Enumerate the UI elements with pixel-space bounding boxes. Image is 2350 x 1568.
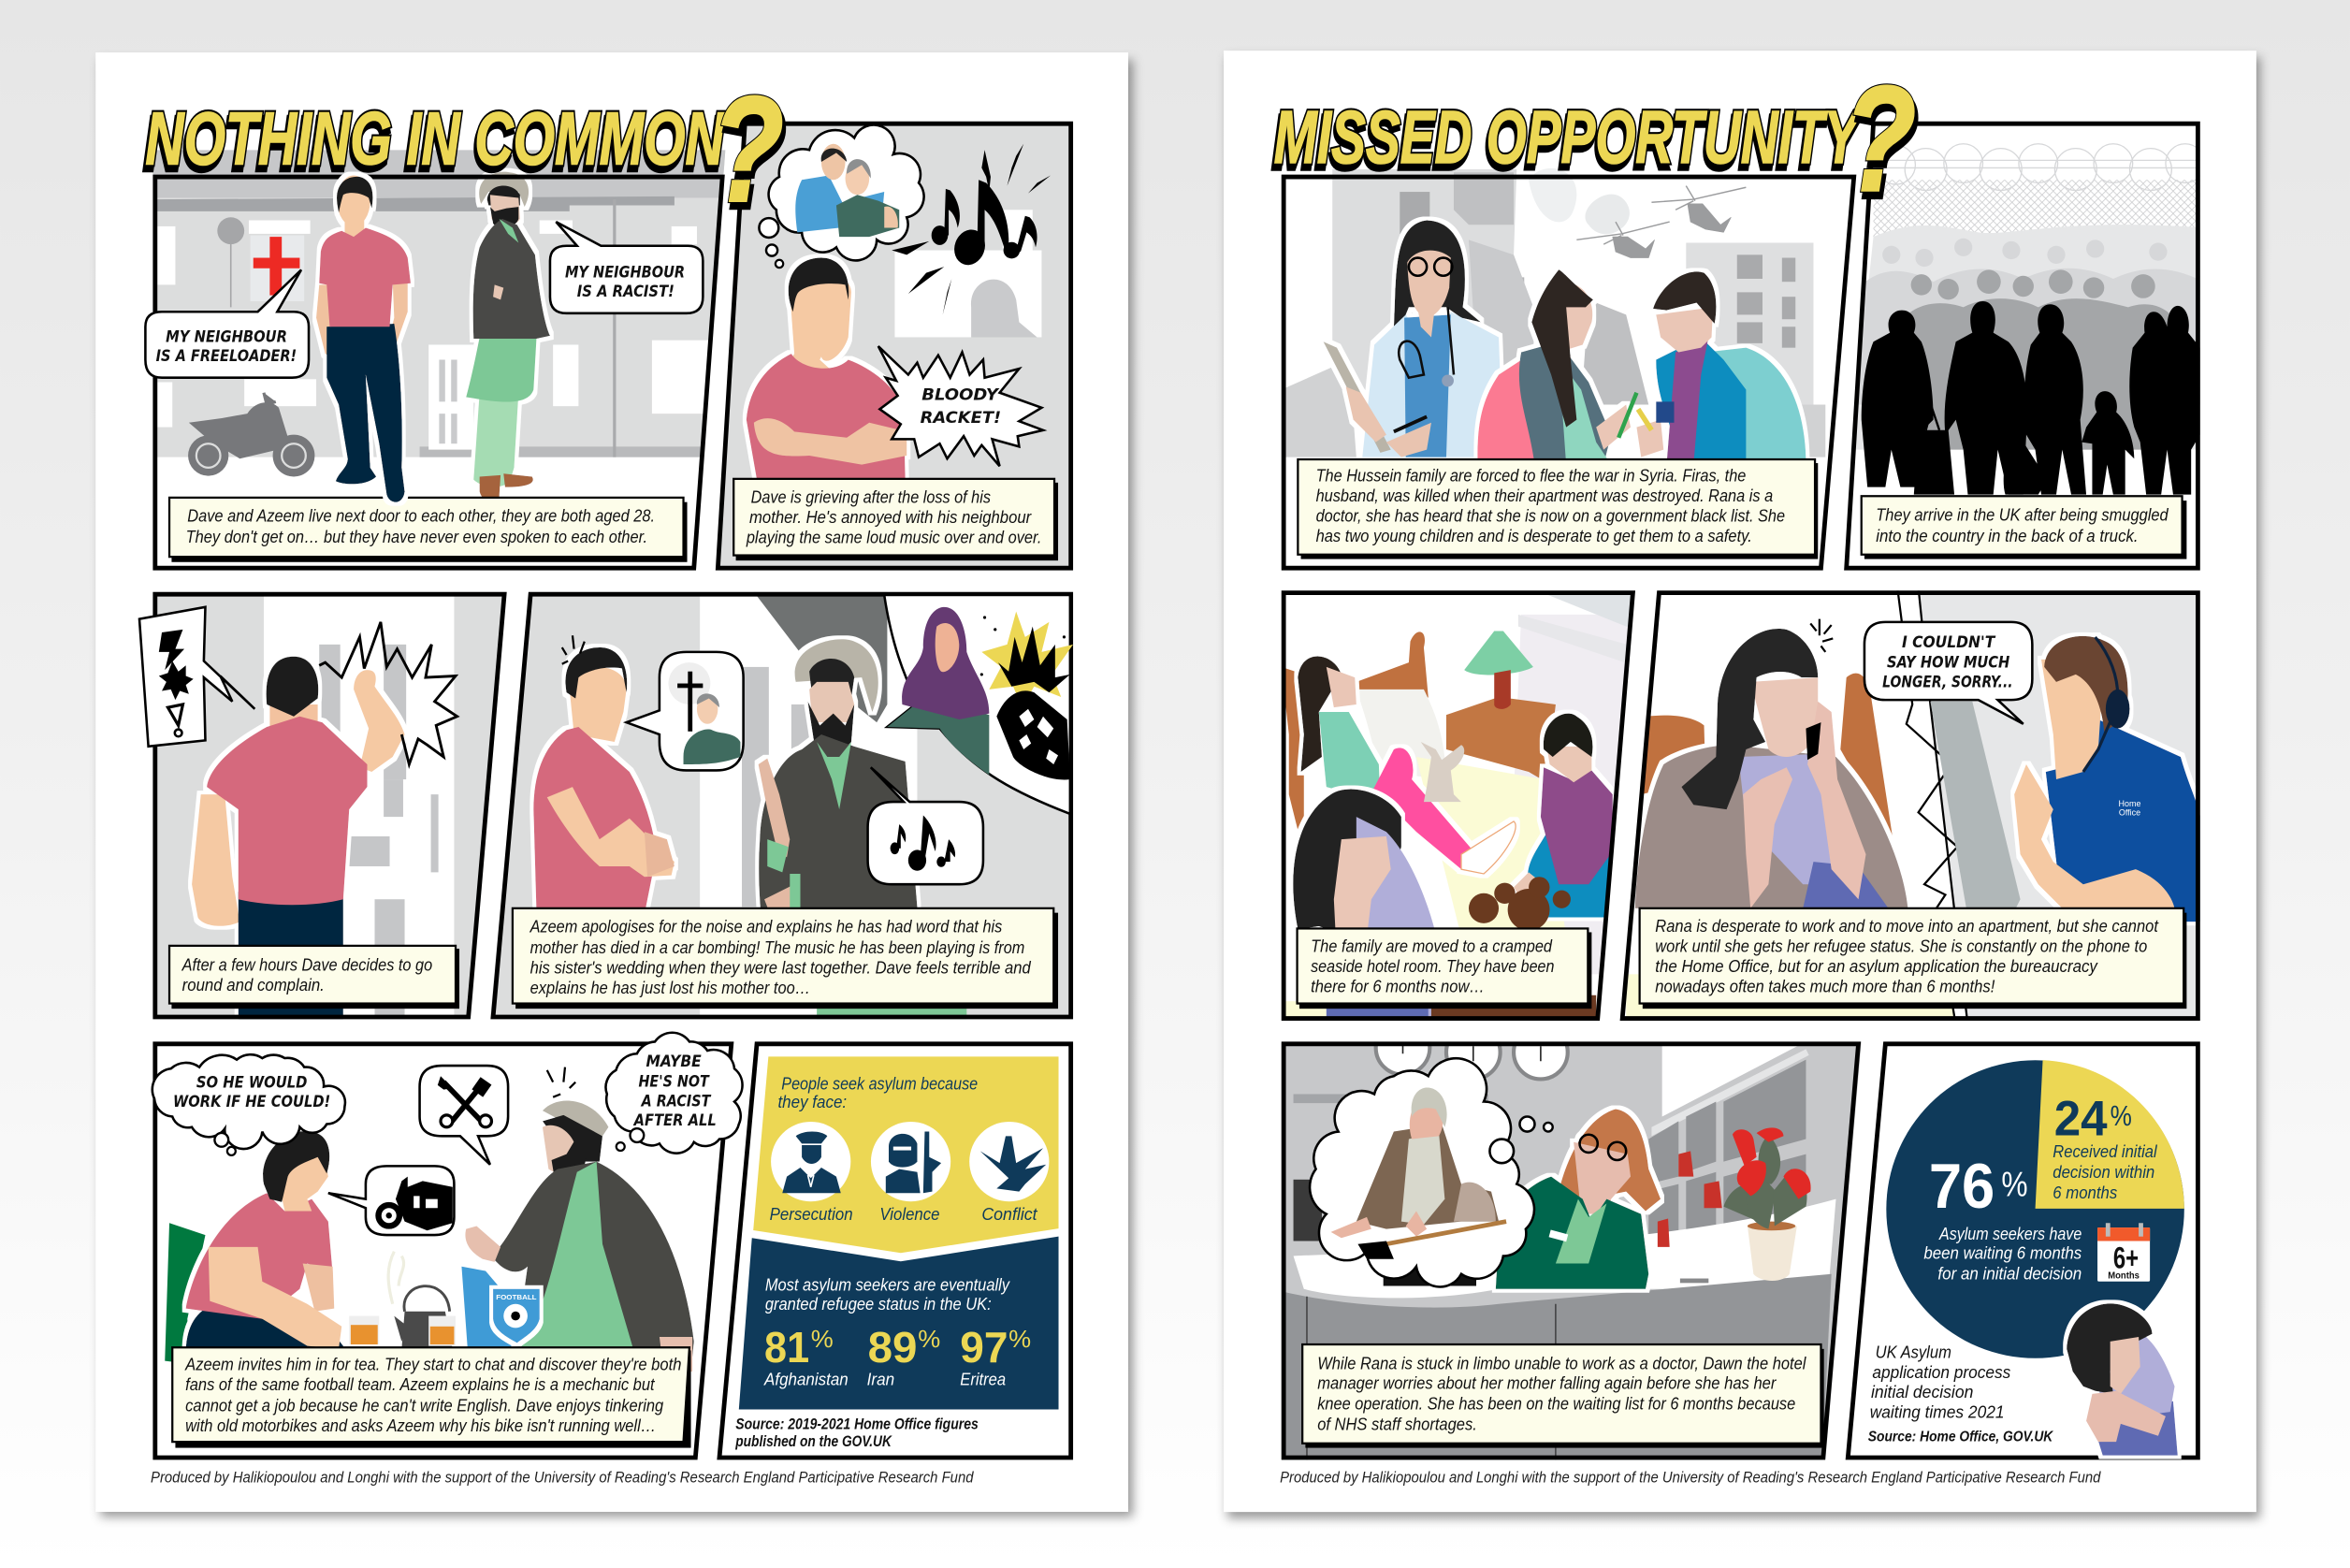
stat: 76 percent: Asylum seekers have: [1938, 1224, 2082, 1243]
text: UK asylum waiting times: waiting times 2021: [1870, 1402, 2005, 1422]
key tags: [1658, 1151, 1722, 1247]
figure: girl: [1477, 269, 1631, 465]
icon: calendar 6+ months: [2097, 1223, 2150, 1282]
title: Missed opportunity: MISSED OPPORTUNITY: [1274, 94, 1863, 179]
speech bubble: music: [868, 767, 983, 884]
stat: 76 percent: [1923, 1152, 2082, 1283]
source note: [734, 1416, 979, 1450]
stat: Iran 89%: Iran: [867, 1369, 894, 1388]
panel: phone call: [1616, 588, 2203, 1025]
heading: people seek asylum: [777, 1074, 978, 1111]
green cushion: [165, 1223, 205, 1364]
text: UK asylum waiting times: initial decision: [1871, 1382, 1973, 1401]
figure: doctor: [1324, 220, 1503, 457]
thought bubble: maybe not a racist: MAYBE: [646, 1052, 702, 1070]
label: conflict: Conflict: [981, 1204, 1037, 1224]
lamp: [1464, 631, 1533, 709]
speech bubble: racist: MY NEIGHBOUR: [565, 262, 685, 281]
page: left: [95, 52, 1128, 1512]
caption: cramped hotel: seaside hotel room. They have been: [1311, 956, 1554, 976]
stat: Eritrea 97%: 97: [960, 1323, 1008, 1372]
border: panel 7: [1284, 177, 1854, 568]
figure: Rana head in hand: [2067, 1303, 2178, 1456]
title: Nothing in common: [144, 65, 786, 239]
caption: Hussein family: The Hussein family are forced to flee the war in Syria. Firas, the: [1316, 466, 1746, 486]
wall clocks: [1376, 1021, 1568, 1079]
stat: 76 percent: 76: [1929, 1152, 1995, 1222]
plant: [1723, 1127, 1811, 1281]
stat: Eritrea 97%: Eritrea: [960, 1369, 1006, 1388]
silhouettes: refugees: [1862, 301, 2200, 495]
caption: tea chat: Azeem invites him in for tea. They start to chat and discover they're both: [184, 1354, 681, 1373]
caption: Dave and Azeem: Dave and Azeem live next door to each other, they are both aged 28.: [187, 506, 655, 526]
caption: Dave complains: round and complain.: [182, 975, 325, 995]
title: Missed opportunity: ?: [1847, 61, 1919, 228]
stat: 24 percent: [2053, 1092, 2157, 1202]
border: panel 4: [493, 594, 1071, 1017]
figure: girl on bed: [1298, 656, 1516, 874]
title: Nothing in common: ?: [712, 65, 784, 233]
stat: Afghanistan 81%: Afghanistan: [763, 1369, 849, 1388]
caption: Dawn: knee operation. She has been on the waiting list for 6 months because: [1317, 1394, 1795, 1414]
figure: Dave standing: [316, 175, 411, 502]
caption: Rana desperate: work until she gets her refugee status. She is constantly on the phone to: [1655, 936, 2147, 955]
border: panel 6: [719, 1044, 1071, 1458]
border: panel 8: [1847, 123, 2198, 568]
title: Missed opportunity: MISSED OPPORTUNITY: [1274, 94, 1863, 179]
title: Missed opportunity: ?: [1844, 54, 1916, 222]
caption: Rana desperate: Rana is desperate to work and to move into an apartment, but she cannot: [1655, 916, 2159, 936]
stat: 76 percent: %: [2001, 1165, 2028, 1203]
knock burst: [319, 622, 457, 764]
caption: smuggled: [1862, 496, 2186, 559]
panel: waiting-time statistics: [1847, 1041, 2200, 1459]
caption: Dave complains: After a few hours Dave decides to go: [181, 954, 432, 974]
banner: refugee status (navy): [739, 1237, 1059, 1410]
speech burst: bloody racket: [878, 346, 1043, 466]
stat: 24 percent: decision within: [2053, 1162, 2154, 1182]
caption: tea chat: with old motorbikes and asks Azeem why his bike isn't running well…: [185, 1416, 656, 1435]
caption: Dave and Azeem: [169, 498, 688, 562]
border: panel 1: [155, 177, 722, 568]
heading: most asylum seekers: [765, 1274, 1010, 1314]
caption: Rana desperate: [1640, 908, 2186, 1009]
figure: Rana on phone: [1635, 629, 1908, 908]
caption: Dawn: While Rana is stuck in limbo unable to work as a doctor, Dawn the hotel: [1317, 1353, 1806, 1372]
source note: Source: 2019-2021 Home Office figures: [735, 1416, 979, 1433]
title: Nothing in common: ?: [714, 71, 786, 239]
title: Nothing in common: NOTHING IN COMMON: [145, 95, 725, 180]
caption: Azeem apologises: explains he has just lost his mother too…: [530, 978, 810, 997]
figure: Dawn receptionist: [1496, 1110, 1661, 1289]
heading: people seek asylum: they face:: [777, 1092, 847, 1111]
caption: Rana desperate: nowadays often takes much more than 6 months!: [1655, 977, 1995, 996]
stat: 24 percent: %: [2111, 1100, 2132, 1132]
badge: football: FOOTBALL: [496, 1293, 537, 1301]
caption: Azeem apologises: his sister's wedding when they were last together. Dave feels terrible and: [530, 958, 1031, 978]
key rack: [1648, 1060, 1806, 1274]
caption: Dave complains: [169, 946, 459, 1009]
text: UK asylum waiting times: UK Asylum: [1876, 1342, 1951, 1361]
nightstand: [1446, 697, 1556, 782]
border: panel 10: [1622, 593, 2198, 1019]
caption: Azeem apologises: [513, 908, 1058, 1009]
memory bubble: mother and car bomb: [884, 595, 1073, 814]
figure: Azeem sitting: [465, 1100, 694, 1376]
panel: Dave knocks: [139, 589, 510, 1026]
icon: violence: [871, 1122, 950, 1201]
title: Missed opportunity: ?: [1844, 54, 1916, 222]
speech bubble: home office: SAY HOW MUCH: [1887, 653, 2009, 672]
speech bubble: freeloader: MY NEIGHBOUR: [166, 327, 287, 345]
caption: cramped hotel: The family are moved to a cramped: [1311, 936, 1553, 955]
panel: tea together: [150, 1033, 743, 1463]
stat: Afghanistan 81%: %: [811, 1327, 834, 1353]
speech bubble: home office: LONGER, SORRY...: [1882, 673, 2013, 691]
panel: smuggled into UK: [1840, 120, 2205, 573]
caption: Hussein family: [1298, 459, 1818, 559]
credit: right page: Produced by Halikiopoulou and Longhi with the support of the University of Reading's Research England Participative Research Fund: [1280, 1468, 2101, 1486]
lightning divider: [1897, 588, 1967, 1025]
title: Nothing in common: ?: [712, 65, 784, 233]
thought bubble: mother fell: [1310, 1058, 1553, 1286]
caption: Rana desperate: the Home Office, but for an asylum application the bureaucracy: [1655, 956, 2098, 976]
caption: Dave grieving: Dave is grieving after the loss of his: [751, 486, 991, 506]
thought bubble: maybe not a racist: AFTER ALL: [632, 1111, 717, 1129]
stat: 76 percent: for an initial decision: [1937, 1263, 2082, 1283]
figure: boy: [1636, 271, 1806, 465]
thought bubble: maybe not a racist: HE'S NOT: [638, 1071, 710, 1090]
stat: 24 percent: 6 months: [2053, 1183, 2117, 1202]
stat: Afghanistan 81%: [763, 1323, 849, 1388]
figure: boy sitting: [1514, 714, 1613, 917]
caption: Dave grieving: playing the same loud music over and over.: [746, 528, 1041, 547]
thought bubble: maybe not a racist: A RACIST: [640, 1091, 712, 1110]
figure: teddy bear: [1469, 877, 1571, 931]
stat: 24 percent: Received initial: [2053, 1141, 2157, 1161]
armchair: [1641, 716, 1705, 794]
border: panel 12: [1848, 1044, 2198, 1458]
speech burst: bloody racket: RACKET!: [921, 408, 1001, 427]
panel: hotel room: [1279, 588, 1641, 1034]
panel: asylum facts: [718, 1041, 1073, 1459]
figure: Azeem standing: [466, 172, 550, 502]
caption: Dave grieving: [733, 479, 1058, 560]
speech bubble: freeloader: [145, 269, 309, 378]
stat: Eritrea 97%: [960, 1323, 1031, 1388]
fence and crowd: [1851, 144, 2205, 450]
panel: hotel manager: [1279, 1021, 1866, 1463]
speech bubble: motorbike: [328, 1166, 454, 1235]
caption: tea chat: cannot get a job because he can't write English. Dave enjoys tinkering: [185, 1395, 664, 1415]
panel: neighbours outside houses: [145, 150, 734, 577]
speech bubble: racist: [550, 222, 703, 313]
figure: Home Office worker: Office: [2119, 808, 2140, 818]
banner: reasons (yellow): [753, 1056, 1059, 1253]
icon: calendar 6+ months: 6+: [2113, 1241, 2139, 1274]
icon: calendar 6+ months: Months: [2108, 1270, 2140, 1282]
heading: most asylum seekers: Most asylum seekers are eventually: [765, 1274, 1010, 1294]
label: violence: Violence: [879, 1204, 939, 1224]
action marks: [562, 635, 585, 664]
stat: Iran 89%: %: [918, 1327, 940, 1353]
stat: Afghanistan 81%: 81: [764, 1323, 809, 1372]
counter: [1294, 1199, 1835, 1298]
caption: Hussein family: has two young children and is desperate to get them to a safety.: [1316, 526, 1752, 545]
caption: Azeem apologises: mother has died in a car bombing! The music he has been playing is from: [530, 937, 1024, 957]
figure: bunny: [1421, 742, 1464, 802]
caption: Hussein family: husband, was killed when their apartment was destroyed. Rana is a: [1316, 486, 1773, 505]
swearing speech box: [139, 607, 254, 747]
panel: fleeing Syria: [1279, 150, 1863, 573]
caption: Dave and Azeem: They don't get on… but they have never even spoken to each other.: [186, 527, 647, 546]
credit: left page: Produced by Halikiopoulou and Longhi with the support of the University of Reading's Research England Participative Research Fund: [151, 1468, 974, 1486]
stat: Eritrea 97%: %: [1008, 1327, 1031, 1353]
stat: Iran 89%: [867, 1323, 940, 1388]
title: Missed opportunity: [1272, 54, 1919, 228]
panel: Azeem apologises: [487, 589, 1079, 1026]
border: panel 11: [1284, 1044, 1859, 1458]
speech bubble: tools: [420, 1066, 508, 1165]
icon: music notes: [892, 144, 1051, 314]
panel: Dave grieving: [704, 120, 1079, 573]
caption: Dawn: [1302, 1344, 1824, 1448]
border: panel 2: [718, 123, 1071, 568]
helicopters: [1576, 186, 1746, 258]
caption: Hussein family: doctor, she has heard that she is now on a government black list. She: [1316, 506, 1785, 526]
speech bubble: freeloader: IS A FREELOADER!: [156, 346, 297, 365]
icon: persecution: [771, 1122, 850, 1201]
caption: tea chat: fans of the same football team. Azeem explains he is a mechanic but: [185, 1374, 655, 1394]
caption: Dawn: manager worries about her mother falling again before she has her: [1317, 1372, 1777, 1392]
stat: 24 percent: 24: [2054, 1092, 2108, 1147]
action marks: [547, 1067, 575, 1097]
icon: conflict: [969, 1122, 1049, 1201]
figure: Dave arms crossed: [533, 647, 675, 914]
caption: tea chat: [172, 1347, 691, 1448]
page: right: [1224, 51, 2256, 1512]
source note: published on the GOV.UK: [734, 1433, 892, 1450]
stat: 76 percent: been waiting 6 months: [1923, 1243, 2082, 1263]
caption: smuggled: into the country in the back of a truck.: [1876, 526, 2139, 545]
border: panel 3: [155, 594, 504, 1017]
icon: tea set: [349, 1252, 456, 1349]
caption: cramped hotel: there for 6 months now…: [1311, 977, 1485, 996]
pie chart: [1886, 1060, 2184, 1358]
figure: Dave sitting: [186, 1131, 343, 1357]
text: UK asylum waiting times: [1868, 1342, 2054, 1445]
caption: smuggled: They arrive in the UK after being smuggled: [1876, 504, 2169, 524]
icon: grey motorbike: [188, 393, 314, 476]
border: panel 5: [155, 1044, 732, 1458]
thought bubble: maybe not a racist: [606, 1033, 743, 1154]
speech bubble: home office: I COULDN'T: [1902, 632, 1996, 651]
stat: Iran 89%: 89: [868, 1323, 917, 1372]
caption: Azeem apologises: Azeem apologises for the noise and explains he has had word that his: [529, 916, 1002, 936]
action marks: [1810, 619, 1833, 652]
figure: Rana sitting: [1293, 789, 1443, 1034]
thought bubble: so he would work: SO HE WOULD: [196, 1072, 307, 1091]
badge: football: [493, 1289, 540, 1343]
pennant: [461, 1267, 512, 1347]
title: Missed opportunity: MISSED OPPORTUNITY: [1272, 99, 1861, 183]
computer monitor: [1930, 702, 2021, 908]
speech bubble: racist: IS A RACIST!: [577, 282, 675, 300]
figure: Home Office worker: Home: [2119, 799, 2140, 808]
thought bubble: dead mother with cross: [627, 652, 744, 770]
thought bubble: so he would work: WORK IF HE COULD!: [173, 1092, 330, 1111]
ruined buildings: [1282, 168, 1825, 457]
title: Nothing in common: NOTHING IN COMMON: [144, 101, 724, 185]
bedsheet: [1416, 757, 1566, 936]
thought bubble: Dave and his mother: [759, 125, 924, 268]
figure: Dave from behind: [192, 657, 405, 1026]
label: persecution: Persecution: [770, 1204, 853, 1224]
text: UK asylum waiting times: Source: Home Office, GOV.UK: [1868, 1428, 2054, 1445]
figure: Home Office worker: [2014, 636, 2203, 959]
heading: most asylum seekers: granted refugee status in the UK:: [765, 1294, 992, 1314]
figure: Dave bust: [747, 258, 907, 480]
caption: Dawn: of NHS staff shortages.: [1317, 1414, 1477, 1433]
title: Nothing in common: NOTHING IN COMMON: [145, 95, 725, 180]
bed headboard: [1282, 667, 1304, 854]
heading: people seek asylum: People seek asylum because: [781, 1074, 978, 1094]
speech burst: bloody racket: BLOODY: [921, 385, 1000, 404]
caption: cramped hotel: [1298, 928, 1591, 1009]
speech bubble: home office: [1864, 622, 2032, 724]
caption: Dave grieving: mother. He's annoyed with his neighbour: [749, 507, 1032, 527]
figure: Azeem explaining: [754, 635, 921, 907]
thought bubble: so he would work: [152, 1054, 345, 1155]
text: UK asylum waiting times: application process: [1872, 1362, 2010, 1382]
border: panel 9: [1284, 593, 1632, 1019]
